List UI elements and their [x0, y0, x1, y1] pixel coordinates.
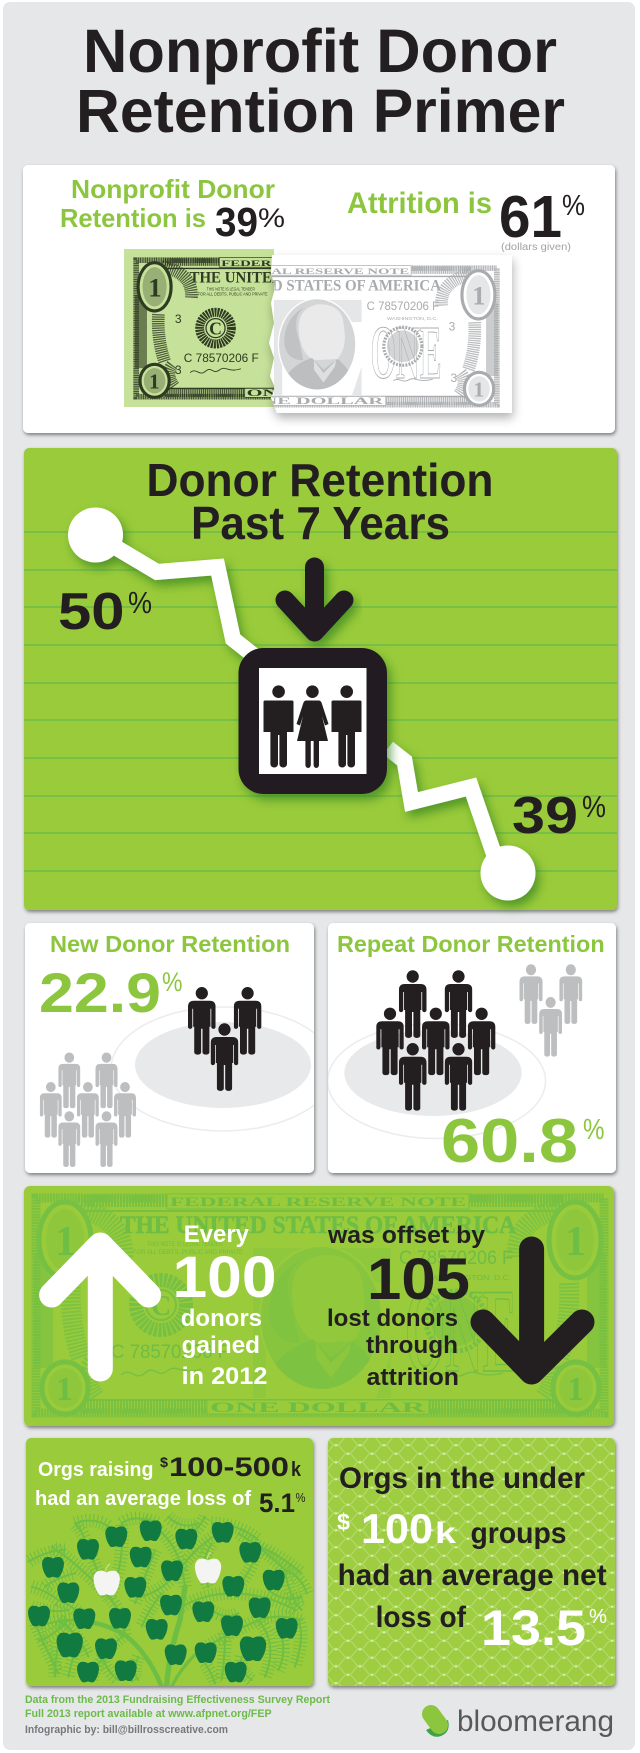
- illustration: dollar bill, retained green part: 3: [175, 363, 182, 377]
- label: 39%: [512, 787, 606, 845]
- text: every 100 donors gained in 2012: in 2012: [182, 1363, 267, 1390]
- text: orgs in the under $100k groups had an average net loss of 13.5%: 100: [361, 1505, 433, 1552]
- text: orgs in the under $100k groups had an average net loss of 13.5%: Orgs in the under: [339, 1462, 586, 1495]
- arrow: up white: [52, 1245, 149, 1369]
- footer: sources and credit: Infographic by: bill@billrosscreative.com: [25, 1724, 228, 1736]
- icon: three retained donors: [188, 987, 261, 1091]
- heading: nonprofit donor retention is 39%: Nonprofit Donor: [71, 174, 275, 204]
- label: 39%: 39: [512, 787, 578, 845]
- illustration: dollar bill, retained green part: [124, 249, 274, 407]
- footer: sources and credit: Full 2013 report available at www.afpnet.org/FEP: [25, 1708, 272, 1720]
- illustration: dollar bill, lost grey part: [266, 254, 519, 424]
- ellipse stage: [111, 1007, 335, 1131]
- label: 50%: %: [128, 585, 152, 620]
- icon: green apples: [28, 1520, 298, 1682]
- panel: new donor retention: [25, 923, 335, 1173]
- stat: 22.9%: 22.9: [39, 961, 161, 1024]
- panel: orgs under $100k with net pattern: [328, 1438, 615, 1686]
- illustration: green dollar bill: [34, 1194, 606, 1416]
- heading: attrition is 61%: (dollars given): [501, 242, 571, 253]
- heading: nonprofit donor retention is 39%: Retention is: [60, 203, 206, 233]
- panel: gained vs lost donors over dollar bill: [24, 1186, 614, 1426]
- illustration: dollar bill, retained green part: THE UNITED STATES OF AMERICA: [190, 269, 441, 286]
- label: 39%: %: [582, 789, 606, 824]
- illustration: dollar bill, retained green part: 1: [148, 272, 162, 302]
- footer: sources and credit: [25, 1694, 330, 1736]
- illustration: green dollar bill: C 78570206 F: [399, 1248, 513, 1269]
- text: orgs raising $100-500k had an average loss of 5.1%: k: [291, 1459, 302, 1481]
- text: orgs in the under $100k groups had an average net loss of 13.5%: k: [435, 1517, 456, 1550]
- heading: nonprofit donor retention is 39%: [60, 174, 285, 245]
- label: 50%: 50: [58, 583, 124, 641]
- illustration: green dollar bill: WASHINGTON, D.C.: [431, 1273, 511, 1282]
- panel: orgs raising 100-500k with apple tree: [26, 1438, 313, 1687]
- text: orgs in the under $100k groups had an average net loss of 13.5%: 13.5: [481, 1600, 586, 1656]
- text: orgs in the under $100k groups had an average net loss of 13.5%: loss of: [376, 1601, 466, 1634]
- logo: bloomerang: bloomerang: [457, 1705, 614, 1738]
- heading: nonprofit donor retention is 39%: %: [258, 203, 285, 233]
- heading: attrition is 61%: %: [562, 190, 585, 222]
- title: [76, 17, 565, 145]
- illustration: green dollar bill: C: [151, 1291, 171, 1322]
- illustration: dollar bill, lost grey part: THE UNITED STATES OF AMERICA: [190, 277, 441, 294]
- illustration: dollar bill, lost grey part: ONE: [370, 311, 442, 395]
- text: was offset by 105 lost donors through attrition: lost donors: [327, 1305, 458, 1332]
- heading: donor retention past 7 years: [146, 454, 494, 549]
- text: was offset by 105 lost donors through attrition: 105: [367, 1247, 470, 1312]
- text: orgs in the under $100k groups had an average net loss of 13.5%: $: [337, 1509, 350, 1535]
- heading: New Donor Retention: [50, 931, 290, 957]
- illustration: dollar bill, lost grey part: C 78570206 F: [367, 299, 439, 313]
- illustration: dollar bill, lost grey part: 3: [449, 319, 456, 333]
- illustration: dollar bill, retained green part: ONE DOLLAR: [247, 389, 383, 399]
- title: Nonprofit Donor: [83, 17, 557, 85]
- illustration: tree branches: [28, 1517, 307, 1687]
- heading: attrition is 61%: Attrition is: [347, 187, 492, 220]
- stat: 60.8%: 60.8: [441, 1107, 578, 1176]
- heading: attrition is 61%: 61: [499, 184, 562, 250]
- text: was offset by 105 lost donors through attrition: through: [366, 1332, 458, 1359]
- panel: repeat donor retention: [328, 923, 616, 1176]
- stat: 60.8%: %: [583, 1114, 604, 1146]
- text: orgs raising $100-500k had an average loss of 5.1%: 100-500: [169, 1452, 289, 1482]
- illustration: dollar bill, retained green part: 3: [175, 312, 182, 326]
- text: every 100 donors gained in 2012: Every: [184, 1221, 250, 1248]
- illustration: green dollar bill: 1: [56, 1371, 73, 1408]
- heading: Repeat Donor Retention: [337, 931, 605, 957]
- text: orgs raising $100-500k had an average loss of 5.1%: had an average loss of: [35, 1488, 251, 1510]
- text: orgs in the under $100k groups had an average net loss of 13.5%: had an average net: [338, 1559, 607, 1592]
- panel: donor retention past 7 years: [24, 448, 617, 910]
- arrow: down black: [483, 1249, 582, 1372]
- text: orgs in the under $100k groups had an average net loss of 13.5%: groups: [470, 1517, 566, 1550]
- illustration: green dollar bill: ONE DOLLAR: [210, 1400, 425, 1416]
- text: every 100 donors gained in 2012: [172, 1221, 276, 1390]
- illustration: green dollar bill: 1: [55, 1219, 76, 1265]
- illustration: dollar bill, lost grey part: WASHINGTON, D.C.: [387, 316, 438, 322]
- text: every 100 donors gained in 2012: gained: [182, 1332, 260, 1359]
- illustration: dollar bill, retained green part: FEDERAL RESERVE NOTE: [221, 259, 410, 268]
- footer: sources and credit: Data from the 2013 Fundraising Effectiveness Survey Report: [25, 1694, 330, 1706]
- text: was offset by 105 lost donors through attrition: attrition: [366, 1364, 459, 1391]
- arrow: down: [285, 567, 344, 632]
- heading: nonprofit donor retention is 39%: 39: [215, 199, 258, 245]
- text: orgs raising $100-500k had an average loss of 5.1%: %: [296, 1490, 306, 1505]
- icon: seven lost donors: [40, 1053, 136, 1167]
- panel: retention and attrition: [23, 165, 615, 433]
- text: every 100 donors gained in 2012: donors: [181, 1305, 262, 1332]
- icon: white apples: [94, 1552, 221, 1595]
- title: Retention Primer: [76, 77, 565, 145]
- chart: white declining line: [68, 508, 536, 900]
- illustration: dollar bill, lost grey part: ONE DOLLAR: [247, 397, 383, 407]
- illustration: dollar bill, lost grey part: 1: [473, 377, 484, 401]
- text: orgs raising $100-500k had an average loss of 5.1%: $: [160, 1454, 168, 1470]
- icon: elevator with three people: [238, 648, 387, 794]
- illustration: dollar bill, retained green part: C 78570206 F: [184, 351, 259, 365]
- icon: three lost donors: [520, 964, 582, 1057]
- illustration: green dollar bill: THE UNITED STATES OF AMERICA: [120, 1212, 516, 1239]
- text: orgs raising $100-500k had an average loss of 5.1%: Orgs raising: [38, 1459, 154, 1481]
- illustration: green dollar bill: FOR ALL DEBTS, PUBLIC AND PRIVATE: [133, 1249, 244, 1256]
- text: every 100 donors gained in 2012: 100: [172, 1245, 276, 1310]
- text: orgs raising $100-500k had an average loss of 5.1%: [35, 1452, 306, 1518]
- text: was offset by 105 lost donors through attrition: [327, 1222, 486, 1391]
- illustration: dollar bill, lost grey part: 3: [450, 371, 457, 385]
- heading: donor retention past 7 years: Donor Retention: [146, 454, 494, 506]
- text: orgs in the under $100k groups had an average net loss of 13.5%: %: [589, 1606, 607, 1628]
- illustration: green dollar bill: C 78570206 F: [111, 1342, 229, 1363]
- icon: seven retained donors: [376, 970, 495, 1111]
- illustration: dollar bill, retained green part: 1: [149, 369, 160, 393]
- illustration: green dollar bill: FEDERAL RESERVE NOTE: [170, 1194, 466, 1209]
- heading: attrition is 61%: [347, 184, 585, 253]
- illustration: green dollar bill: THIS NOTE IS LEGAL TENDER: [147, 1241, 223, 1248]
- illustration: dollar bill, lost grey part: FEDERAL RESERVE NOTE: [221, 267, 410, 276]
- stat: 22.9%: %: [162, 967, 182, 997]
- ellipse stage: [328, 1024, 546, 1138]
- illustration: dollar bill, retained green part: C: [209, 318, 222, 338]
- illustration: dollar bill, lost grey part: 1: [472, 280, 485, 310]
- text: orgs in the under $100k groups had an average net loss of 13.5%: [337, 1462, 607, 1656]
- text: was offset by 105 lost donors through attrition: was offset by: [327, 1222, 486, 1249]
- heading: donor retention past 7 years: Past 7 Years: [191, 497, 450, 549]
- illustration: green dollar bill: 1: [567, 1371, 584, 1408]
- illustration: dollar bill, retained green part: FOR ALL DEBTS, PUBLIC AND PRIVATE: [198, 292, 268, 297]
- illustration: dollar bill, retained green part: THIS NOTE IS LEGAL TENDER: [207, 287, 255, 292]
- illustration: green dollar bill: 1: [565, 1219, 586, 1265]
- label: 50%: [58, 583, 152, 641]
- text: orgs raising $100-500k had an average loss of 5.1%: 5.1: [259, 1488, 295, 1518]
